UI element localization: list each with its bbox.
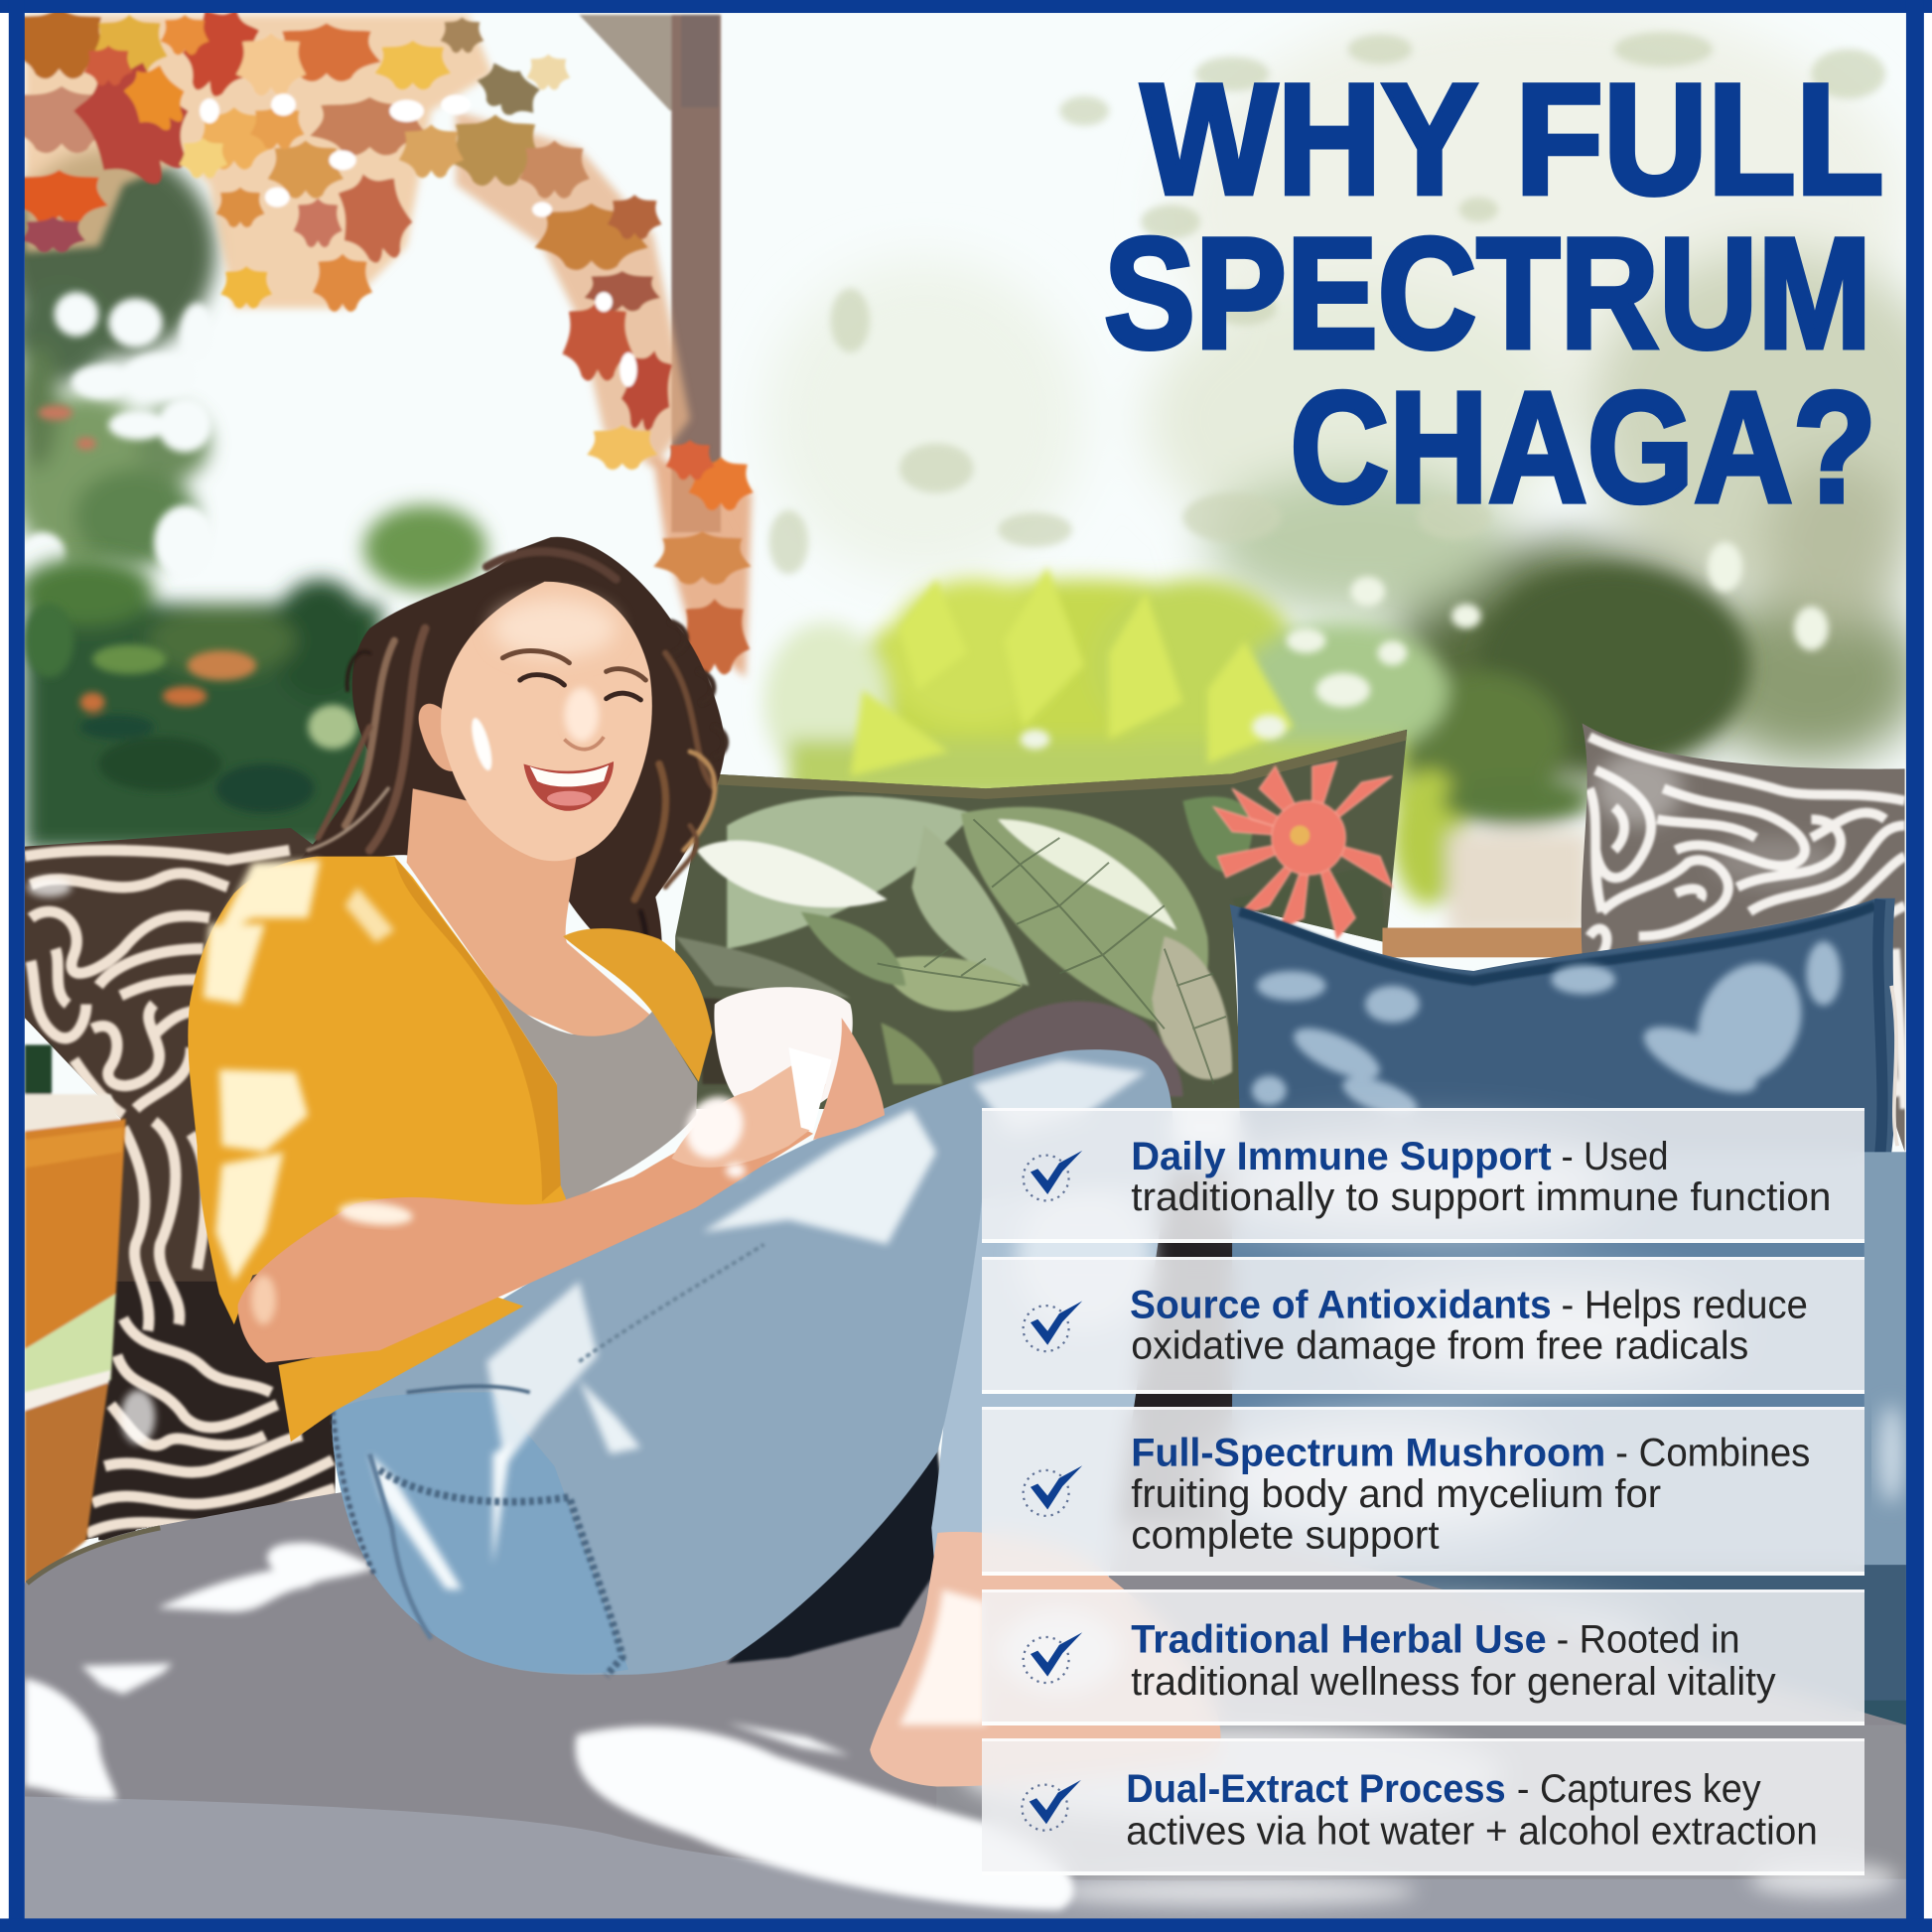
jeans: main thigh and hip bbox=[332, 1049, 1173, 1676]
title: WHY FULL bbox=[1141, 51, 1884, 227]
text: traditional herbal use: - Rooted in bbox=[1557, 1617, 1740, 1662]
neck and chest bbox=[407, 788, 659, 1047]
autumn leaves bbox=[5, 0, 754, 678]
sunlight patches on seat bbox=[25, 1543, 1073, 1910]
wooden bench frame bbox=[25, 1044, 126, 1589]
shadow under leg bbox=[727, 1442, 949, 1663]
garden: dark foliage at left bbox=[6, 148, 486, 850]
seat cushion bbox=[25, 1491, 1906, 1918]
hair behind shoulders bbox=[296, 537, 726, 993]
pillow: white and grey maze pattern at right bbox=[1578, 715, 1910, 1159]
far leg shin in jeans bbox=[931, 1136, 1171, 1589]
right-edge zebra strip bbox=[1891, 986, 1897, 1146]
icon: dotted check mark bbox=[1024, 1465, 1082, 1516]
text: traditional herbal use bbox=[1131, 1617, 1776, 1704]
panel: source of antioxidants bbox=[982, 1257, 1864, 1394]
ear bbox=[419, 704, 459, 771]
text: full-spectrum mushroom bbox=[1131, 1432, 1810, 1558]
lower blue cloth behind panels bbox=[1072, 1140, 1906, 1743]
icon: dotted check mark bbox=[1024, 1301, 1082, 1351]
panel: dual-extract process bbox=[982, 1738, 1864, 1875]
text: dual-extract process bbox=[1126, 1767, 1818, 1853]
text: full-spectrum mushroom: complete support bbox=[1131, 1514, 1440, 1558]
sun streak on blue strip at right edge bbox=[1879, 1405, 1903, 1503]
icon: dotted check mark bbox=[1024, 1151, 1082, 1200]
grey tank top bbox=[492, 986, 697, 1207]
text: full-spectrum mushroom: Full-Spectrum Mushroom bbox=[1131, 1432, 1605, 1475]
white mug bbox=[714, 987, 853, 1113]
left pillow: zebra pattern bbox=[19, 819, 357, 1553]
hands holding mug bbox=[671, 1018, 885, 1177]
panel: full-spectrum mushroom bbox=[982, 1407, 1864, 1576]
panel: traditional herbal use bbox=[982, 1589, 1864, 1725]
pillow: green leaf print bbox=[665, 721, 1417, 1115]
text: dual-extract process: - Captures key bbox=[1517, 1767, 1761, 1811]
bare foot bbox=[870, 1532, 1221, 1787]
wood rail behind pillows bbox=[1382, 928, 1585, 957]
porch post and beam bbox=[579, 15, 721, 532]
icon: dotted check mark bbox=[1024, 1632, 1082, 1683]
icon: pink flower on pillow bbox=[1213, 761, 1392, 939]
title bbox=[1104, 51, 1884, 535]
forearm bbox=[238, 1109, 813, 1363]
text: traditional herbal use: traditional wellness for general vitality bbox=[1131, 1660, 1776, 1704]
text: source of antioxidants: Source of Antioxidants bbox=[1130, 1284, 1552, 1327]
text: full-spectrum mushroom: fruiting body and mycelium for bbox=[1131, 1472, 1661, 1516]
icon: dotted check mark bbox=[1022, 1780, 1081, 1831]
text: daily immune support: - Used bbox=[1562, 1135, 1669, 1178]
background: sky and garden bbox=[723, 13, 1906, 960]
text: daily immune support bbox=[1131, 1135, 1831, 1219]
yellow cardigan bbox=[188, 857, 712, 1442]
face bbox=[441, 582, 652, 861]
text: full-spectrum mushroom: - Combines bbox=[1615, 1432, 1810, 1475]
text: daily immune support: Daily Immune Support bbox=[1131, 1135, 1552, 1178]
text: source of antioxidants: - Helps reduce bbox=[1562, 1284, 1808, 1327]
text: traditional herbal use: Traditional Herbal Use bbox=[1131, 1617, 1547, 1662]
panel: daily immune support bbox=[982, 1108, 1864, 1243]
text: dual-extract process: Dual-Extract Process bbox=[1126, 1767, 1506, 1811]
text: daily immune support: traditionally to support immune function bbox=[1131, 1175, 1831, 1219]
pillow: navy cushion bbox=[1230, 898, 1895, 1171]
text: dual-extract process: actives via hot water + alcohol extraction bbox=[1126, 1809, 1818, 1853]
text: source of antioxidants: oxidative damage from free radicals bbox=[1131, 1324, 1748, 1368]
text: source of antioxidants bbox=[1130, 1284, 1808, 1368]
